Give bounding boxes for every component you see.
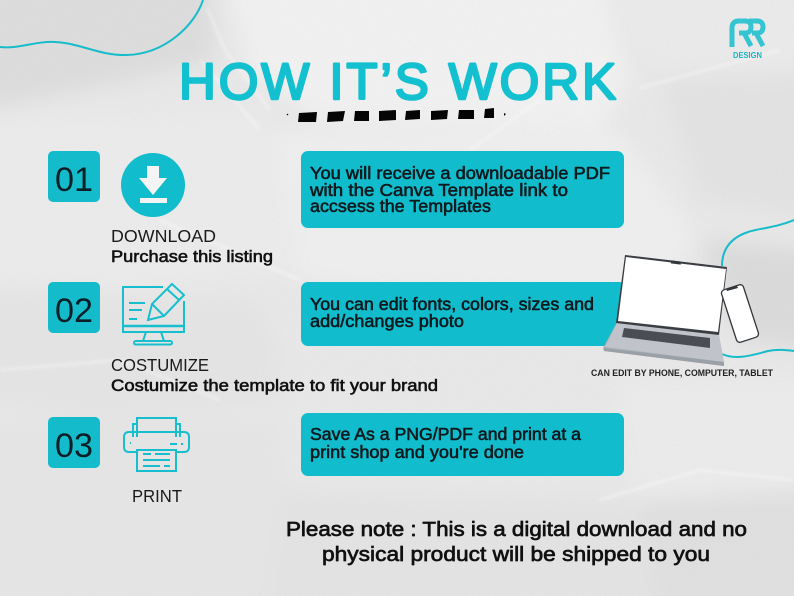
- logo: RR Design: DESIGN: [733, 51, 762, 60]
- step 1 description: Purchase this listing: [111, 248, 273, 266]
- illustration: laptop and phone: [603, 255, 759, 366]
- panel: step 3 text: [301, 413, 624, 476]
- panel: step 1 text: [301, 151, 624, 228]
- note: [286, 518, 747, 566]
- dashed underline: [287, 108, 506, 122]
- panel: step 3 text: Save As a PNG/PDF and print at a: [310, 424, 581, 444]
- panel: step 2 text: [301, 282, 626, 346]
- step 2 description: Costumize the template to fit your brand: [111, 377, 438, 395]
- logo: RR Design: [732, 21, 763, 60]
- step 3 number badge: [48, 417, 100, 468]
- panel: step 1 text: You will receive a downloadable PDF: [310, 163, 610, 183]
- panel: step 1 text: with the Canva Template link to: [309, 180, 568, 200]
- caption: devices: CAN EDIT BY PHONE, COMPUTER, TABLET: [591, 368, 774, 378]
- decorative curve top-left: [0, 0, 203, 55]
- step 1 number badge: [48, 151, 100, 202]
- icon: printer: [124, 418, 189, 471]
- title: HOW IT’S WORK: [179, 53, 616, 110]
- icon: monitor with pencil: [123, 284, 184, 344]
- icon: download: [121, 153, 185, 217]
- step 1 number badge: 01: [55, 161, 93, 199]
- step 2 number badge: 02: [55, 292, 93, 330]
- panel: step 2 text: You can edit fonts, colors, sizes and: [310, 294, 594, 314]
- panel: step 3 text: print shop and you're done: [310, 442, 524, 462]
- decorative curve right top: [722, 220, 794, 266]
- panel: step 1 text: accsess the Templates: [310, 196, 491, 216]
- decorative curve right bottom: [722, 350, 794, 357]
- step 3 label: PRINT: [132, 486, 182, 506]
- step 2 number badge: [48, 282, 100, 333]
- step 1 label: DOWNLOAD: [111, 226, 216, 246]
- note: physical product will be shipped to you: [322, 543, 710, 566]
- step 3 number badge: 03: [55, 427, 93, 465]
- step 2 label: COSTUMIZE: [111, 355, 209, 375]
- note: Please note : This is a digital download and no: [286, 518, 747, 541]
- panel: step 2 text: add/changes photo: [310, 311, 464, 331]
